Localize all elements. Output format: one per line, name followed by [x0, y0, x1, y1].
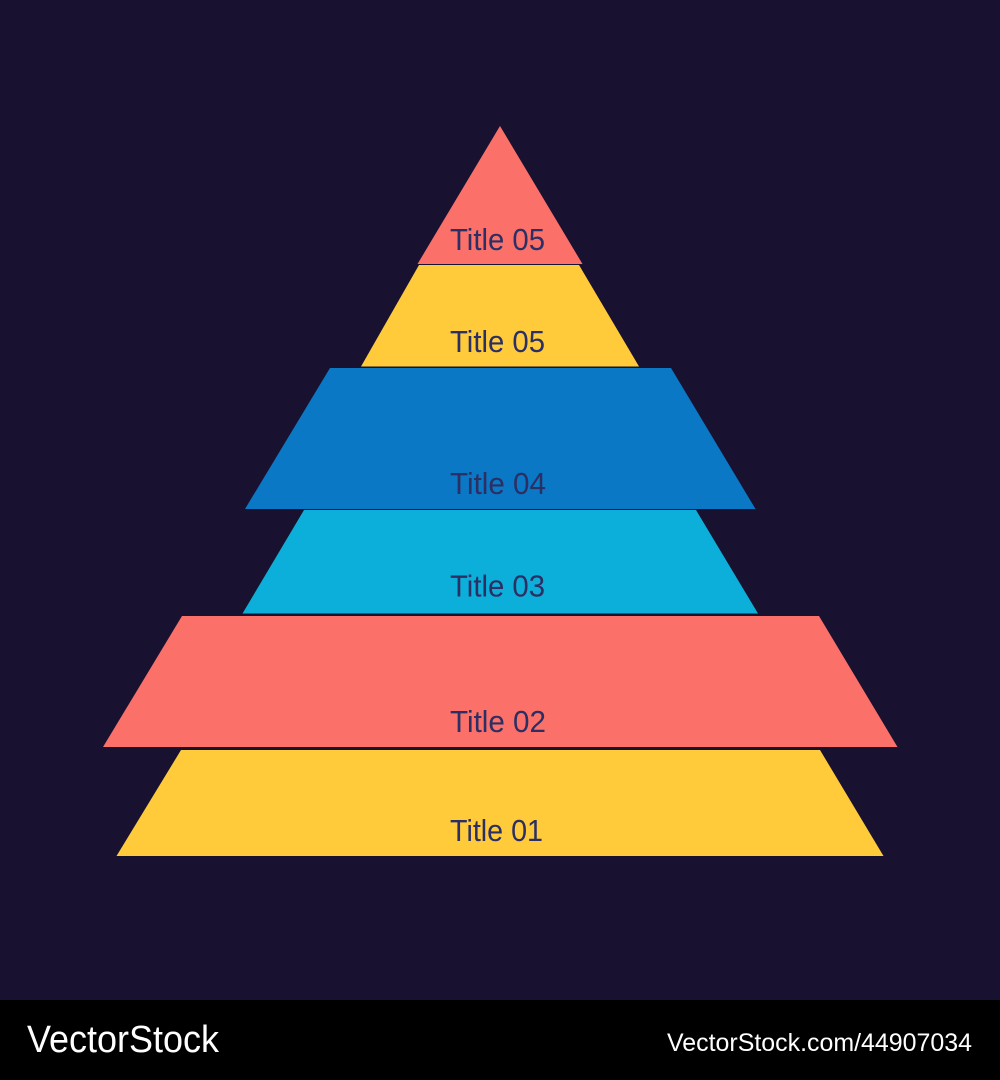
tier: Title 04 — [245, 368, 756, 509]
tier: Title 02 — [103, 616, 898, 747]
tier: Title 01 — [116, 750, 884, 856]
watermark logo text: VectorStock — [27, 1019, 220, 1061]
pyramid — [103, 126, 898, 856]
tier: Title 04: Title 04 — [450, 466, 546, 501]
tier: Title 02: Title 02 — [450, 704, 546, 739]
tier: Title 05 top: Title 05 — [450, 222, 545, 257]
tier: Title 05 second — [361, 265, 639, 366]
tier: Title 01: Title 01 — [450, 813, 543, 848]
tier: Title 05 top — [418, 126, 582, 264]
tier: Title 03: Title 03 — [450, 568, 545, 604]
watermark bar — [0, 1000, 1000, 1080]
tier: Title 05 second: Title 05 — [450, 324, 545, 359]
watermark url text: VectorStock.com/44907034 — [667, 1029, 972, 1057]
tier: Title 03 — [242, 510, 758, 614]
